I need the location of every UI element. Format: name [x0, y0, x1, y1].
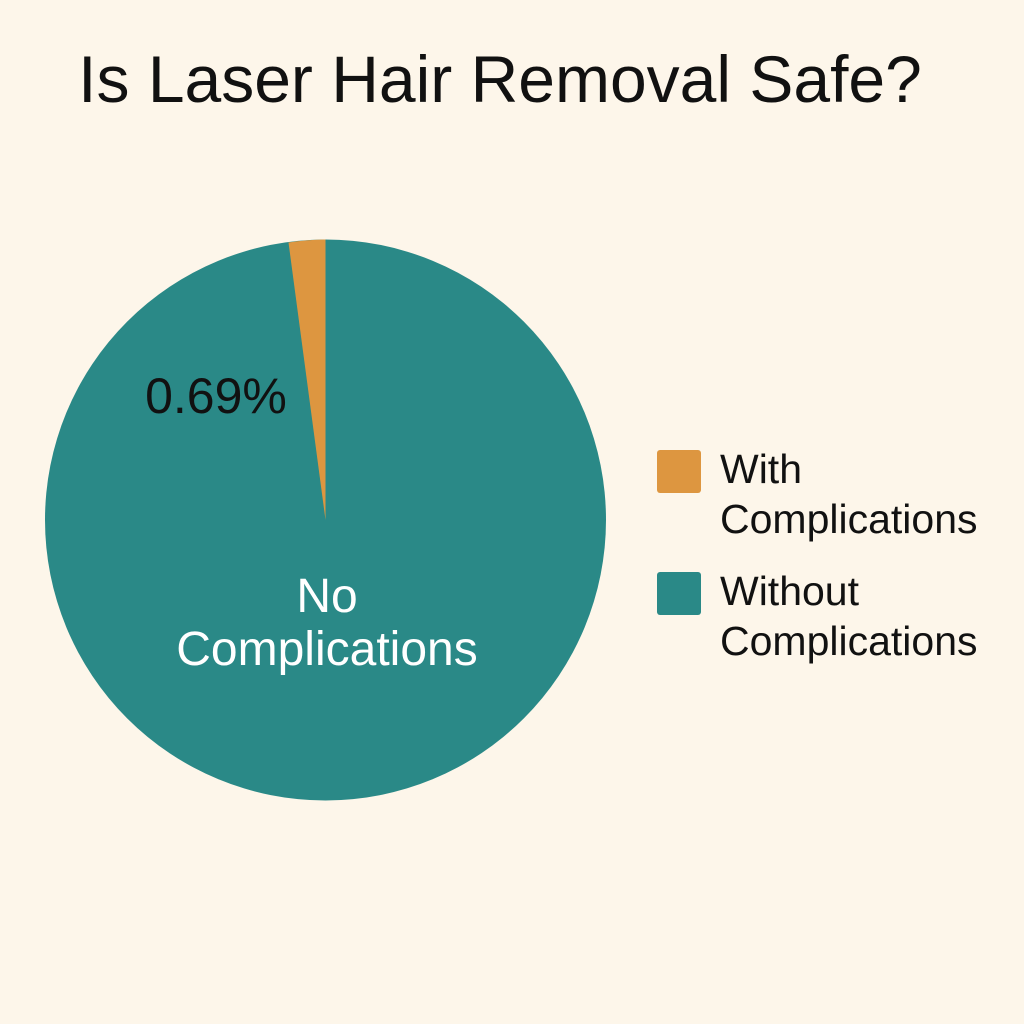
legend: without complications: [657, 568, 978, 664]
slice: with complications: [288, 240, 326, 520]
legend: with complications: [657, 446, 978, 542]
label: No Complications: No: [296, 570, 358, 623]
label: 0.69%: 0.69%: [145, 368, 287, 424]
title: Is Laser Hair Removal Safe?: [78, 42, 922, 116]
pie chart: Complications: [176, 623, 478, 676]
slice: without complications: [45, 240, 606, 800]
legend: without complications: Complications: [720, 618, 978, 664]
legend: with complications: With: [720, 446, 802, 492]
legend: with complications: Complications: [720, 496, 978, 542]
legend: without complications: Without: [720, 568, 859, 614]
